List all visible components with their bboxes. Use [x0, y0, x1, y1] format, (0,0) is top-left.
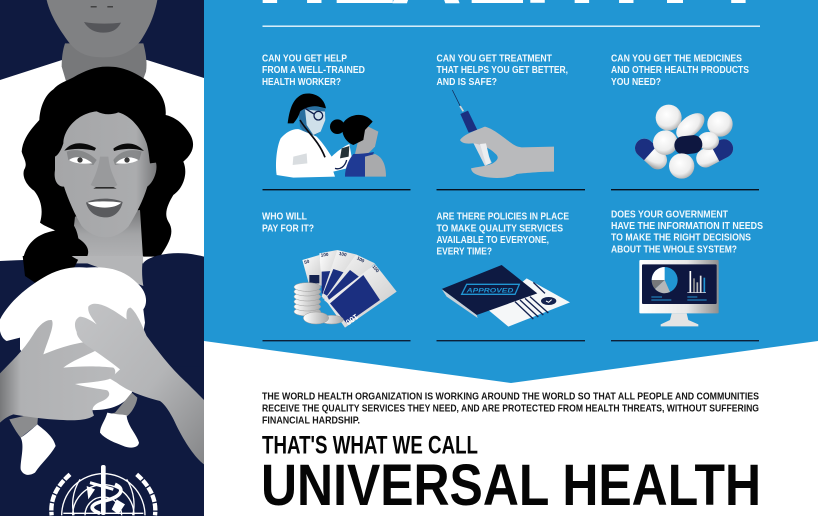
question text: AVAILABLE TO EVERYONE, [436, 235, 549, 246]
left illustration panel [0, 0, 204, 516]
question text: WHO WILL [262, 212, 308, 223]
panel: financing [262, 212, 410, 341]
icon: banknotes and coins: 100 [343, 312, 360, 327]
subheading: THAT'S WHAT WE CALL [262, 432, 478, 460]
hair behind baby [23, 256, 80, 286]
top divider [262, 26, 760, 27]
woman face [55, 111, 157, 237]
question text: CAN YOU GET THE MEDICINES [611, 54, 742, 64]
woman neck [70, 210, 143, 263]
question text: TO MAKE QUALITY SERVICES [436, 223, 563, 234]
icon: computer monitor with charts [639, 260, 719, 326]
panel: policies [436, 212, 585, 341]
question text: ARE THERE POLICIES IN PLACE [436, 212, 569, 223]
question text: CAN YOU GET TREATMENT [436, 54, 553, 64]
woman eyebrows, eyes, nose and mouth [64, 143, 144, 217]
icon: syringe in hand [452, 90, 554, 178]
icon: banknotes and coins: 100 [356, 256, 366, 264]
hair curl at shoulder [23, 224, 88, 257]
question text: EVERY TIME? [436, 247, 492, 258]
icon: banknotes and coins: 100 [320, 252, 329, 258]
question text: YOU NEED? [611, 77, 661, 88]
question text: TO MAKE THE RIGHT DECISIONS [611, 233, 751, 244]
question text: AND IS SAFE? [436, 77, 497, 88]
icon: approved folder and document: APPROVED [465, 287, 514, 294]
top figure neck and face [47, 0, 157, 83]
panel: medicines [611, 54, 759, 190]
question text: ABOUT THE WHOLE SYSTEM? [611, 244, 737, 255]
baby right leg and foot [100, 393, 139, 448]
icon: banknotes and coins: 100 [371, 264, 380, 274]
question text: CAN YOU GET HELP [262, 54, 347, 64]
icon: banknotes and coins [294, 250, 397, 328]
WHO emblem [51, 465, 155, 515]
question text: FROM A WELL-TRAINED [262, 65, 365, 76]
icon: pills [631, 105, 736, 179]
question text: HAVE THE INFORMATION IT NEEDS [611, 221, 763, 232]
baby body [0, 267, 146, 410]
blue background panel [204, 0, 818, 383]
panel: information [611, 209, 763, 341]
top figure white shirt [0, 60, 204, 270]
icon: doctor and patient [276, 93, 386, 178]
icon: banknotes and coins: 100 [338, 251, 347, 258]
woman navy top [0, 253, 204, 367]
question text: THAT HELPS YOU GET BETTER, [436, 65, 568, 76]
question text: HEALTH WORKER? [262, 77, 341, 88]
baby left leg and foot [9, 413, 56, 475]
body paragraph: FINANCIAL HARDSHIP. [262, 416, 360, 426]
woman right hand and arm [75, 304, 204, 464]
question text: PAY FOR IT? [262, 223, 314, 234]
icon: approved folder and document [442, 265, 570, 327]
panel: health worker [262, 54, 410, 190]
body paragraph: THE WORLD HEALTH ORGANIZATION IS WORKING AROUND THE WORLD SO THAT ALL PEOPLE AND COMMUNITIES [262, 392, 759, 402]
question text: DOES YOUR GOVERNMENT [611, 209, 729, 220]
woman neck lower [72, 256, 143, 286]
woman hair [22, 67, 193, 257]
icon: banknotes and coins: 50 [304, 259, 310, 265]
question text: AND OTHER HEALTH PRODUCTS [611, 65, 749, 76]
panel: treatment [436, 54, 585, 190]
woman left hand [0, 320, 115, 423]
